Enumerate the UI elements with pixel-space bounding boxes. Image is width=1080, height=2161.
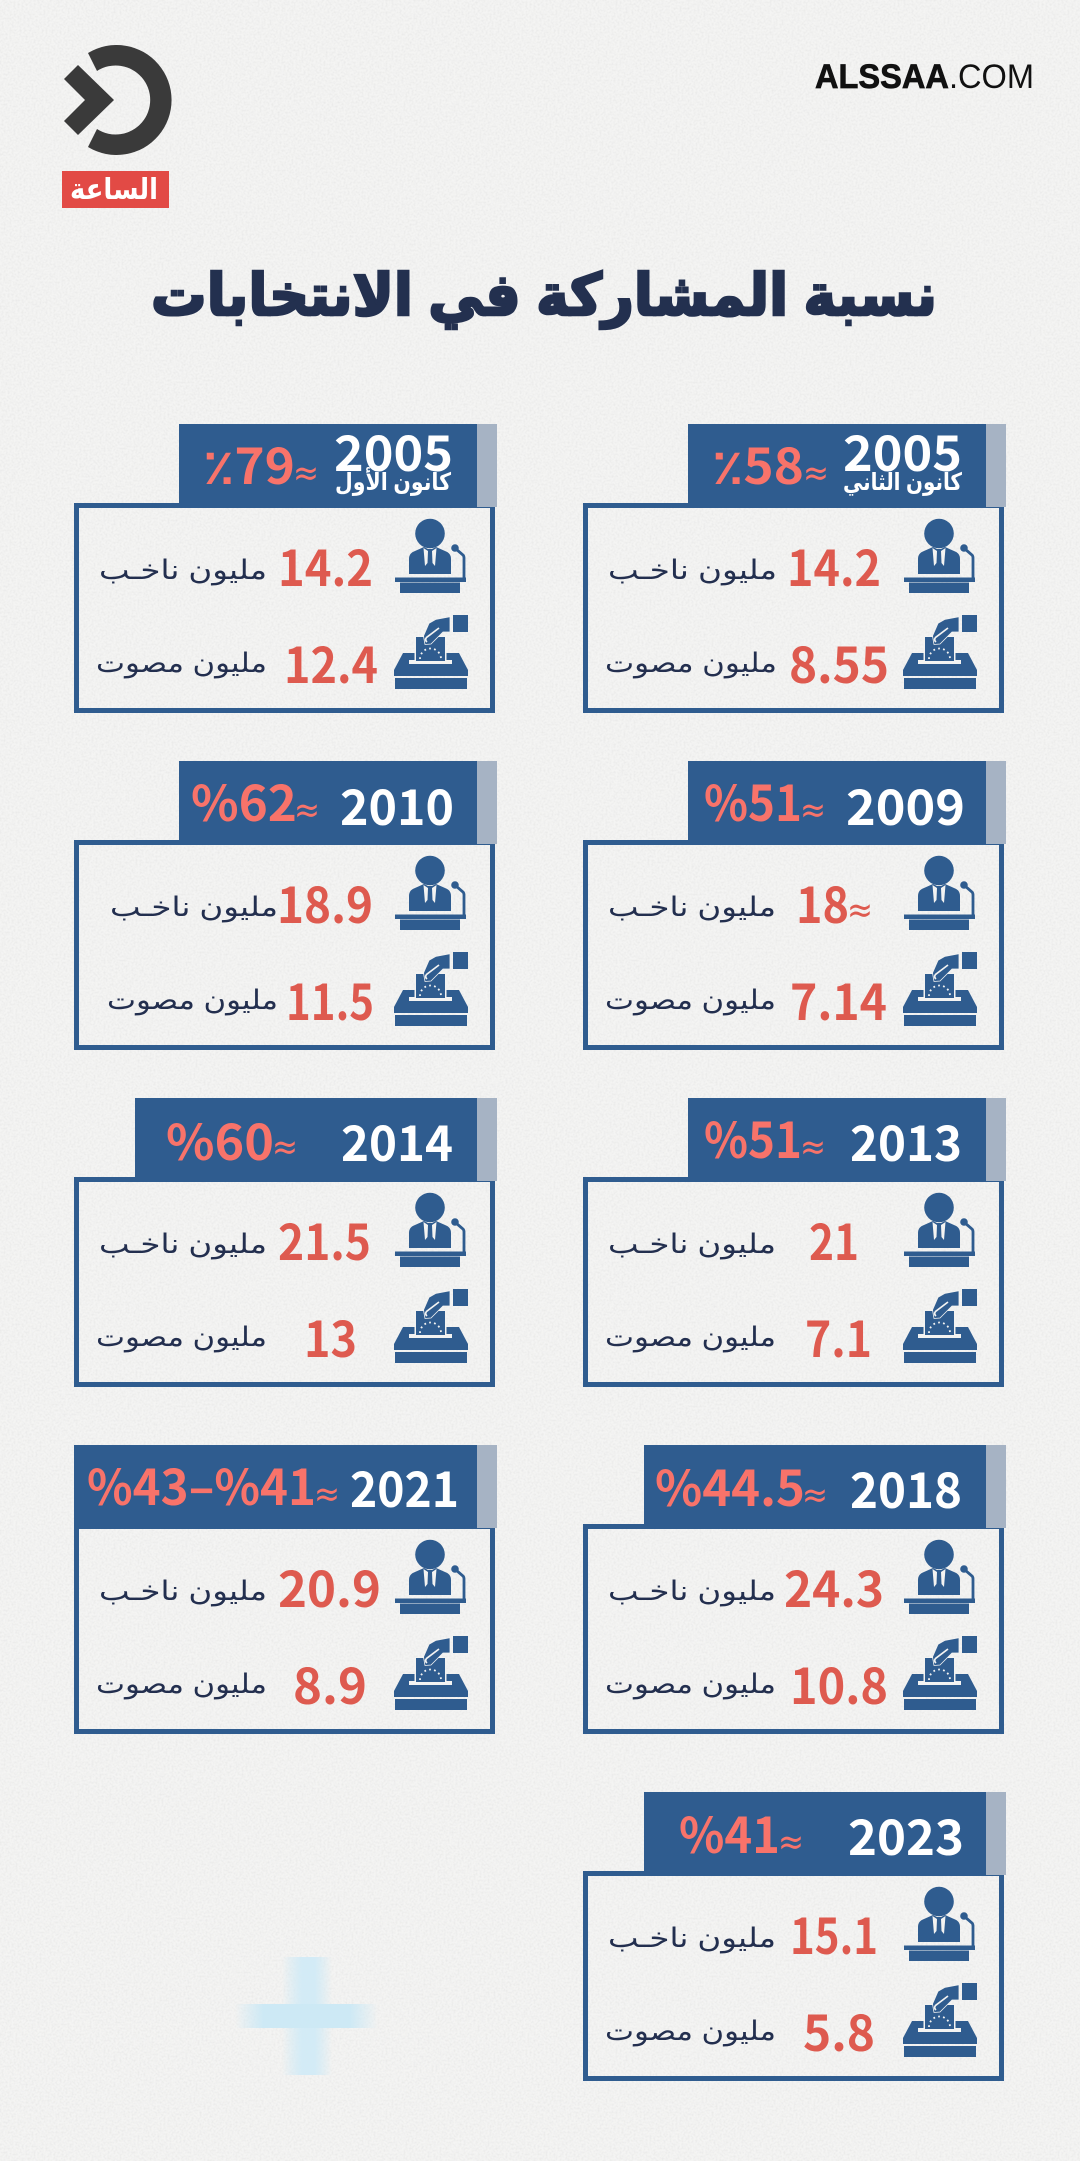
- approx sign: ≈: [272, 1127, 298, 1168]
- icon: ballot box: [394, 952, 468, 1026]
- turnout: ٪58: [712, 428, 804, 499]
- registered voters figure: 21: [809, 1204, 859, 1275]
- label: million electors: مليون ناخـب: [608, 1229, 776, 1260]
- icon: candidate at podium: [395, 1193, 466, 1267]
- panel: 2018: [586, 1445, 1006, 1732]
- turnout: %60: [166, 1104, 274, 1175]
- approx sign: ≈: [803, 453, 829, 494]
- year: 2005: [334, 415, 453, 486]
- icon: candidate at podium: [395, 1540, 466, 1614]
- turnout range: %43–%41: [87, 1449, 316, 1520]
- year: 2013: [850, 1105, 962, 1176]
- icon: candidate at podium: [395, 856, 466, 930]
- icon: candidate at podium: [904, 1887, 975, 1961]
- voters figure: 5.8: [803, 1995, 875, 2066]
- logo: Alssaa chevron mark: [64, 45, 172, 155]
- registered voters figure: 15.1: [790, 1898, 878, 1969]
- icon: ballot box: [903, 1289, 977, 1363]
- approx sign: ≈: [293, 453, 319, 494]
- registered voters figure: 24.3: [784, 1551, 884, 1622]
- label: million voters: مليون مصوت: [605, 2016, 776, 2047]
- year: 2014: [341, 1105, 453, 1176]
- year: 2005: [843, 415, 962, 486]
- turnout: %51: [704, 1102, 802, 1173]
- label: million voters: مليون مصوت: [605, 985, 776, 1016]
- turnout: %44.5: [655, 1450, 805, 1521]
- label: million electors: مليون ناخـب: [99, 555, 267, 586]
- year: 2010: [340, 769, 454, 840]
- label: million electors: مليون ناخـب: [608, 892, 776, 923]
- label: million voters: مليون مصوت: [107, 985, 278, 1016]
- label: million electors: مليون ناخـب: [608, 1923, 776, 1954]
- icon: ballot box: [903, 1636, 977, 1710]
- turnout: ٪79: [203, 428, 295, 499]
- icon: ballot box: [394, 615, 468, 689]
- icon: candidate at podium: [904, 856, 975, 930]
- turnout: %51: [704, 765, 802, 836]
- panel: 2009: [586, 761, 1006, 1048]
- panel: 2010: [76, 761, 497, 1048]
- panel: 2013: [586, 1098, 1006, 1384]
- panel: 2014: [76, 1098, 497, 1384]
- year: 2009: [846, 769, 965, 840]
- registered voters figure: 18.9: [277, 867, 373, 938]
- label: million voters: مليون مصوت: [605, 1669, 776, 1700]
- label: million voters: مليون مصوت: [605, 648, 777, 679]
- label: million electors: مليون ناخـب: [99, 1229, 267, 1260]
- label: million electors: مليون ناخـب: [608, 555, 777, 586]
- icon: ballot box: [903, 952, 977, 1026]
- label: million voters: مليون مصوت: [605, 1322, 776, 1353]
- voters figure: 8.55: [789, 627, 889, 698]
- icon: ballot box: [903, 1983, 977, 2057]
- turnout: %41: [679, 1797, 780, 1868]
- label: million voters: مليون مصوت: [96, 1669, 267, 1700]
- registered voters figure: 14.2: [787, 530, 881, 601]
- logo: red Alsaa label: الساعة: [70, 172, 158, 206]
- voters figure: 7.1: [805, 1301, 872, 1372]
- icon: candidate at podium: [904, 1540, 975, 1614]
- icon: ballot box: [394, 1289, 468, 1363]
- month: كانون الثاني: [843, 469, 962, 496]
- approx sign: ≈: [314, 1474, 340, 1515]
- label: million electors: مليون ناخـب: [110, 892, 278, 923]
- panel: January 2005: [586, 415, 1006, 710]
- registered voters figure: 20.9: [278, 1551, 381, 1622]
- website name: ALSSAA.COM: [815, 58, 1034, 96]
- registered voters figure: 18: [796, 867, 849, 938]
- label: million voters: مليون مصوت: [96, 648, 267, 679]
- icon: candidate at podium: [904, 519, 975, 593]
- panel: 2023: [586, 1792, 1006, 2078]
- year: 2023: [848, 1799, 964, 1870]
- turnout: %62: [191, 765, 297, 836]
- icon: ballot box: [394, 1636, 468, 1710]
- voters figure: 12.4: [284, 627, 378, 698]
- icon: candidate at podium: [904, 1193, 975, 1267]
- label: million electors: مليون ناخـب: [99, 1576, 267, 1607]
- year: 2018: [850, 1452, 962, 1523]
- icon: ballot box: [903, 615, 977, 689]
- approx sign: ≈: [800, 1127, 826, 1168]
- month: كانون الأول: [335, 467, 451, 496]
- icon: candidate at podium: [395, 519, 466, 593]
- panel: December 2005: [76, 415, 497, 710]
- voters figure: 7.14: [790, 964, 887, 1035]
- voters figure: 8.9: [293, 1648, 367, 1719]
- label: million electors: مليون ناخـب: [608, 1576, 776, 1607]
- decorative blurred plus: [235, 1957, 378, 2075]
- panel: 2021: [74, 1445, 497, 1732]
- approx sign: ≈: [802, 1475, 828, 1516]
- voters figure: 13: [304, 1301, 357, 1372]
- year: 2021: [350, 1451, 459, 1522]
- registered voters figure: 14.2: [278, 530, 373, 601]
- approx sign: ≈: [778, 1822, 804, 1863]
- title: نسبة المشاركة في الانتخابات: [151, 263, 937, 329]
- approx sign: ≈: [294, 790, 320, 831]
- voters figure: 10.8: [790, 1648, 888, 1719]
- label: million voters: مليون مصوت: [96, 1322, 267, 1353]
- registered voters figure: 21.5: [278, 1204, 371, 1275]
- approx sign: ≈: [800, 790, 826, 831]
- approx sign: ≈: [847, 890, 873, 931]
- voters figure: 11.5: [286, 964, 374, 1035]
